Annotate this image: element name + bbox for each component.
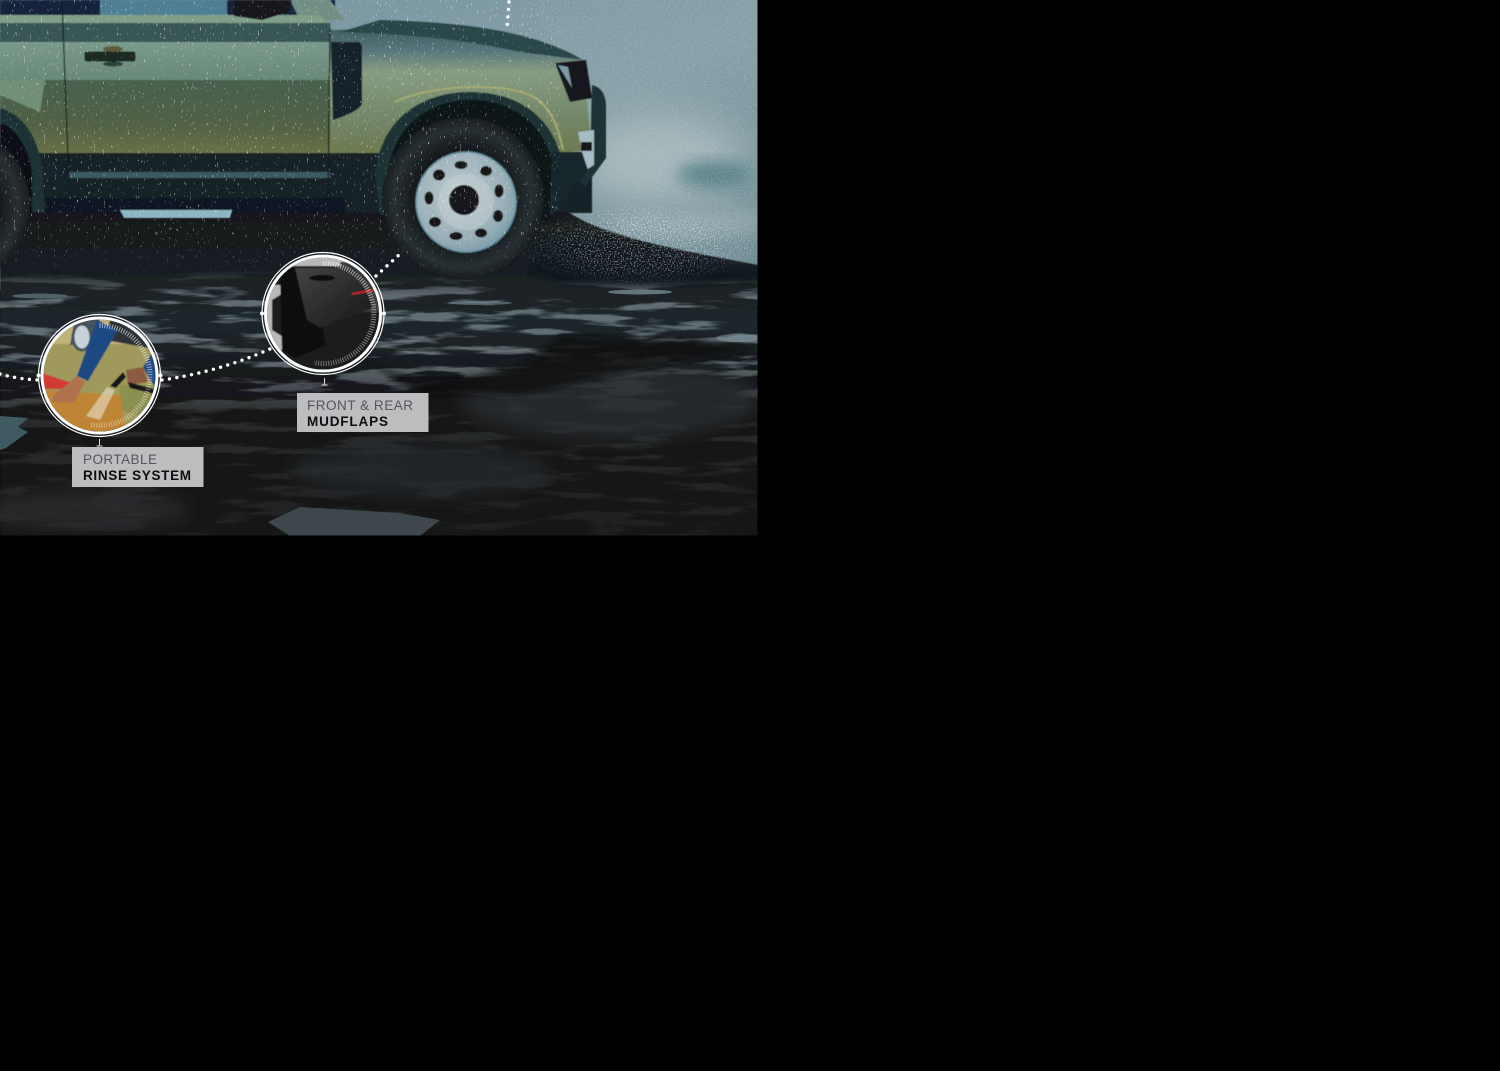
sky and water spray backdrop — [0, 0, 770, 290]
label: front and rear mudflaps: FRONT & REAR — [307, 398, 413, 413]
label: front and rear mudflaps: MUDFLAPS — [307, 414, 388, 429]
running board — [120, 210, 232, 218]
vehicle — [0, 0, 606, 285]
front bumper and lamp — [552, 60, 606, 216]
rear wheel — [0, 108, 45, 285]
callout circle: portable rinse system photo — [36, 314, 162, 440]
tick ring — [90, 325, 150, 425]
label: portable rinse system — [72, 439, 204, 487]
wheel hub — [449, 185, 479, 215]
label: front and rear mudflaps — [297, 378, 428, 432]
label: portable rinse system: PORTABLE — [83, 452, 157, 467]
wheel arch trim — [375, 92, 562, 215]
front wheel — [382, 117, 544, 279]
label: portable rinse system: RINSE SYSTEM — [83, 468, 191, 483]
side vent — [331, 42, 362, 120]
callout circle: mudflaps photo — [260, 252, 386, 376]
splash at the front wheel — [524, 208, 758, 288]
rocky wet ground — [0, 205, 760, 536]
dotted connector lines — [0, 2, 509, 380]
tick ring — [314, 263, 374, 363]
vehicle body side panels — [0, 0, 592, 213]
rain over the vehicle and foreground — [0, 0, 560, 285]
door seams and door handle — [62, 0, 330, 200]
mirror — [234, 0, 292, 20]
illustrated scene panel — [0, 0, 758, 536]
